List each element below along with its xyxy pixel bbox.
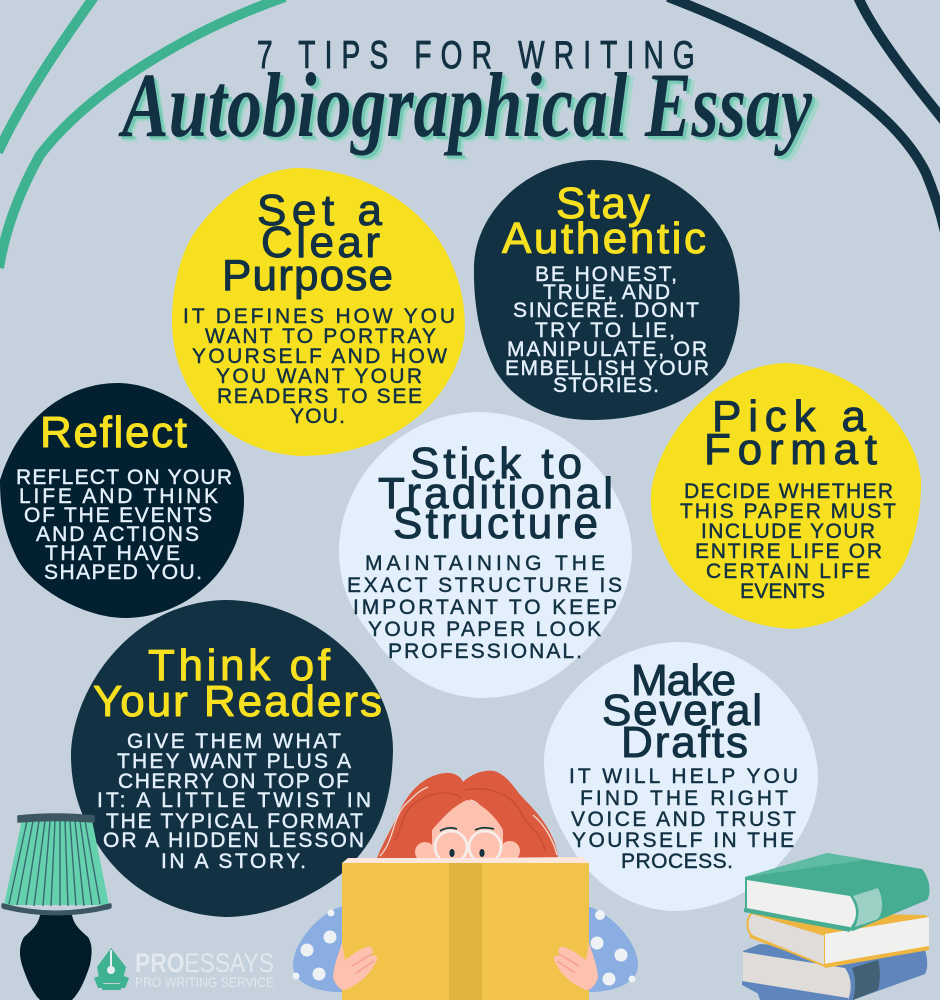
logo tagline: PRO WRITING SERVICE [135, 975, 274, 990]
heading: stay authentic [502, 179, 706, 263]
text: make several drafts: FIND THE RIGHT [580, 787, 788, 810]
heading: set a clear purpose: Set a [257, 186, 383, 235]
blue book [742, 944, 927, 1000]
text: pick a format: ENTIRE LIFE OR [695, 540, 882, 563]
text: pick a format: CERTAIN LIFE [706, 560, 870, 583]
text: stay authentic: TRY TO LIE, [535, 319, 675, 342]
right sleeve [585, 906, 638, 992]
illustration: girl reading [292, 771, 638, 1000]
text: stick to traditional structure: PROFESSIONAL. [388, 640, 582, 663]
text: pick a format [680, 480, 896, 603]
panel: stick to traditional structure [339, 412, 632, 698]
text: reflect: THAT HAVE [45, 542, 180, 565]
text: think of your readers: GIVE THEM WHAT [127, 730, 341, 753]
heading: stay authentic: Stay [556, 179, 650, 228]
text: stay authentic: EMBELLISH YOUR [505, 357, 709, 380]
text: reflect: SHAPED YOU. [44, 561, 202, 584]
text: stick to traditional structure: YOUR PAPER LOOK [368, 618, 601, 641]
text: stick to traditional structure: MAINTAINING THE [365, 552, 605, 575]
text: pick a format: THIS PAPER MUST [680, 500, 896, 523]
text: set a clear purpose: IT DEFINES HOW YOU [183, 305, 455, 328]
text: stay authentic [505, 263, 709, 397]
text: set a clear purpose: WANT TO PORTRAY [205, 325, 436, 348]
text: make several drafts: IT WILL HELP YOU [569, 765, 798, 788]
heading: set a clear purpose: Purpose [222, 251, 393, 300]
panel: reflect [0, 383, 244, 618]
left hand [333, 943, 377, 990]
book cover [342, 863, 589, 1000]
text: set a clear purpose: YOU. [290, 405, 345, 428]
orange book [748, 912, 929, 968]
heading: make several drafts: Make [631, 656, 736, 705]
hair [377, 771, 558, 858]
heading: make several drafts [602, 656, 762, 767]
text: think of your readers [97, 730, 371, 873]
text: pick a format: INCLUDE YOUR [701, 520, 875, 543]
heading: stay authentic: Authentic [502, 214, 706, 263]
hair highlights [380, 787, 557, 856]
heading: pick a format [704, 392, 877, 474]
text: make several drafts: VOICE AND TRUST [571, 808, 796, 831]
text: stay authentic: MANIPULATE, OR [507, 338, 707, 361]
heading: make several drafts: Several [602, 686, 762, 735]
heading: think of your readers: Think of [148, 641, 331, 690]
left sleeve [292, 906, 345, 992]
ears [415, 841, 520, 862]
heading: stick to traditional structure: Structure [393, 499, 598, 548]
text: reflect: REFLECT ON YOUR [16, 466, 232, 489]
face [432, 800, 503, 860]
book spine [449, 863, 482, 1000]
heading: stick to traditional structure: Traditional [378, 469, 613, 518]
text: make several drafts: YOURSELF IN THE [572, 829, 794, 852]
text: set a clear purpose: YOU WANT YOUR [216, 365, 422, 388]
right hand [554, 943, 598, 990]
icon: table lamp [1, 814, 112, 1000]
panel: make several drafts [544, 642, 818, 911]
text: reflect: AND ACTIONS [36, 523, 199, 546]
heading: set a clear purpose [222, 186, 393, 300]
text: stick to traditional structure: EXACT STRUCTURE IS [347, 574, 622, 597]
text: make several drafts [569, 765, 798, 873]
decorative navy arcs [668, 0, 940, 232]
text: stay authentic: STORIES. [553, 374, 659, 397]
text: pick a format: EVENTS [740, 580, 825, 603]
heading: think of your readers: Your Readers [93, 677, 382, 726]
heading: pick a format: Format [704, 425, 877, 474]
subtitle: 7 TIPS FOR WRITING [257, 34, 695, 77]
text: stick to traditional structure: IMPORTANT TO KEEP [353, 596, 617, 619]
eyes [449, 849, 485, 857]
decorative teal arcs [0, 0, 285, 268]
text: pick a format: DECIDE WHETHER [684, 480, 893, 503]
heading: stick to traditional structure [378, 439, 613, 548]
text: think of your readers: CHERRY ON TOP OF [118, 770, 349, 793]
glasses [435, 831, 501, 863]
text: stay authentic: TRUE, AND [543, 281, 670, 304]
text: think of your readers: IT: A LITTLE TWIST IN [97, 789, 371, 812]
text: think of your readers: IN A STORY. [161, 850, 306, 873]
text: stay authentic: BE HONEST, [535, 263, 677, 286]
panel: set a clear purpose [172, 168, 465, 456]
heading: make several drafts: Drafts [621, 718, 748, 767]
icon: pen nib [94, 948, 129, 990]
text: set a clear purpose: YOURSELF AND HOW [192, 345, 447, 368]
heading: pick a format: Pick a [712, 392, 867, 441]
text: set a clear purpose: READERS TO SEE [217, 385, 422, 408]
heading: stick to traditional structure: Stick to [410, 439, 582, 488]
text: make several drafts: PROCESS. [621, 850, 733, 873]
heading: reflect: Reflect [40, 408, 187, 457]
text: reflect: LIFE AND THINK [19, 485, 218, 508]
panel: think of your readers [71, 600, 393, 917]
title [118, 34, 820, 161]
text: stay authentic: SINCERE. DONT [513, 299, 699, 322]
book pages [342, 857, 589, 863]
green book [744, 853, 930, 932]
logo text: PROESSAYS [135, 948, 274, 978]
logo: pro essays [94, 948, 274, 990]
text: stick to traditional structure [347, 552, 622, 663]
text: set a clear purpose [183, 305, 455, 428]
heading: think of your readers [93, 641, 382, 726]
text: reflect: OF THE EVENTS [24, 504, 212, 527]
illustration: stack of books [742, 853, 930, 1000]
text: think of your readers: THE TYPICAL FORMAT [106, 810, 363, 833]
text: think of your readers: OR A HIDDEN LESSON [103, 829, 364, 852]
hair waves [395, 789, 545, 850]
text: reflect [16, 466, 232, 584]
panel: pick a format [651, 363, 921, 629]
text: think of your readers: THEY WANT PLUS A [117, 750, 351, 773]
eyebrows [440, 828, 494, 831]
panel: stay authentic [474, 160, 740, 420]
heading: set a clear purpose: Clear [261, 218, 380, 267]
